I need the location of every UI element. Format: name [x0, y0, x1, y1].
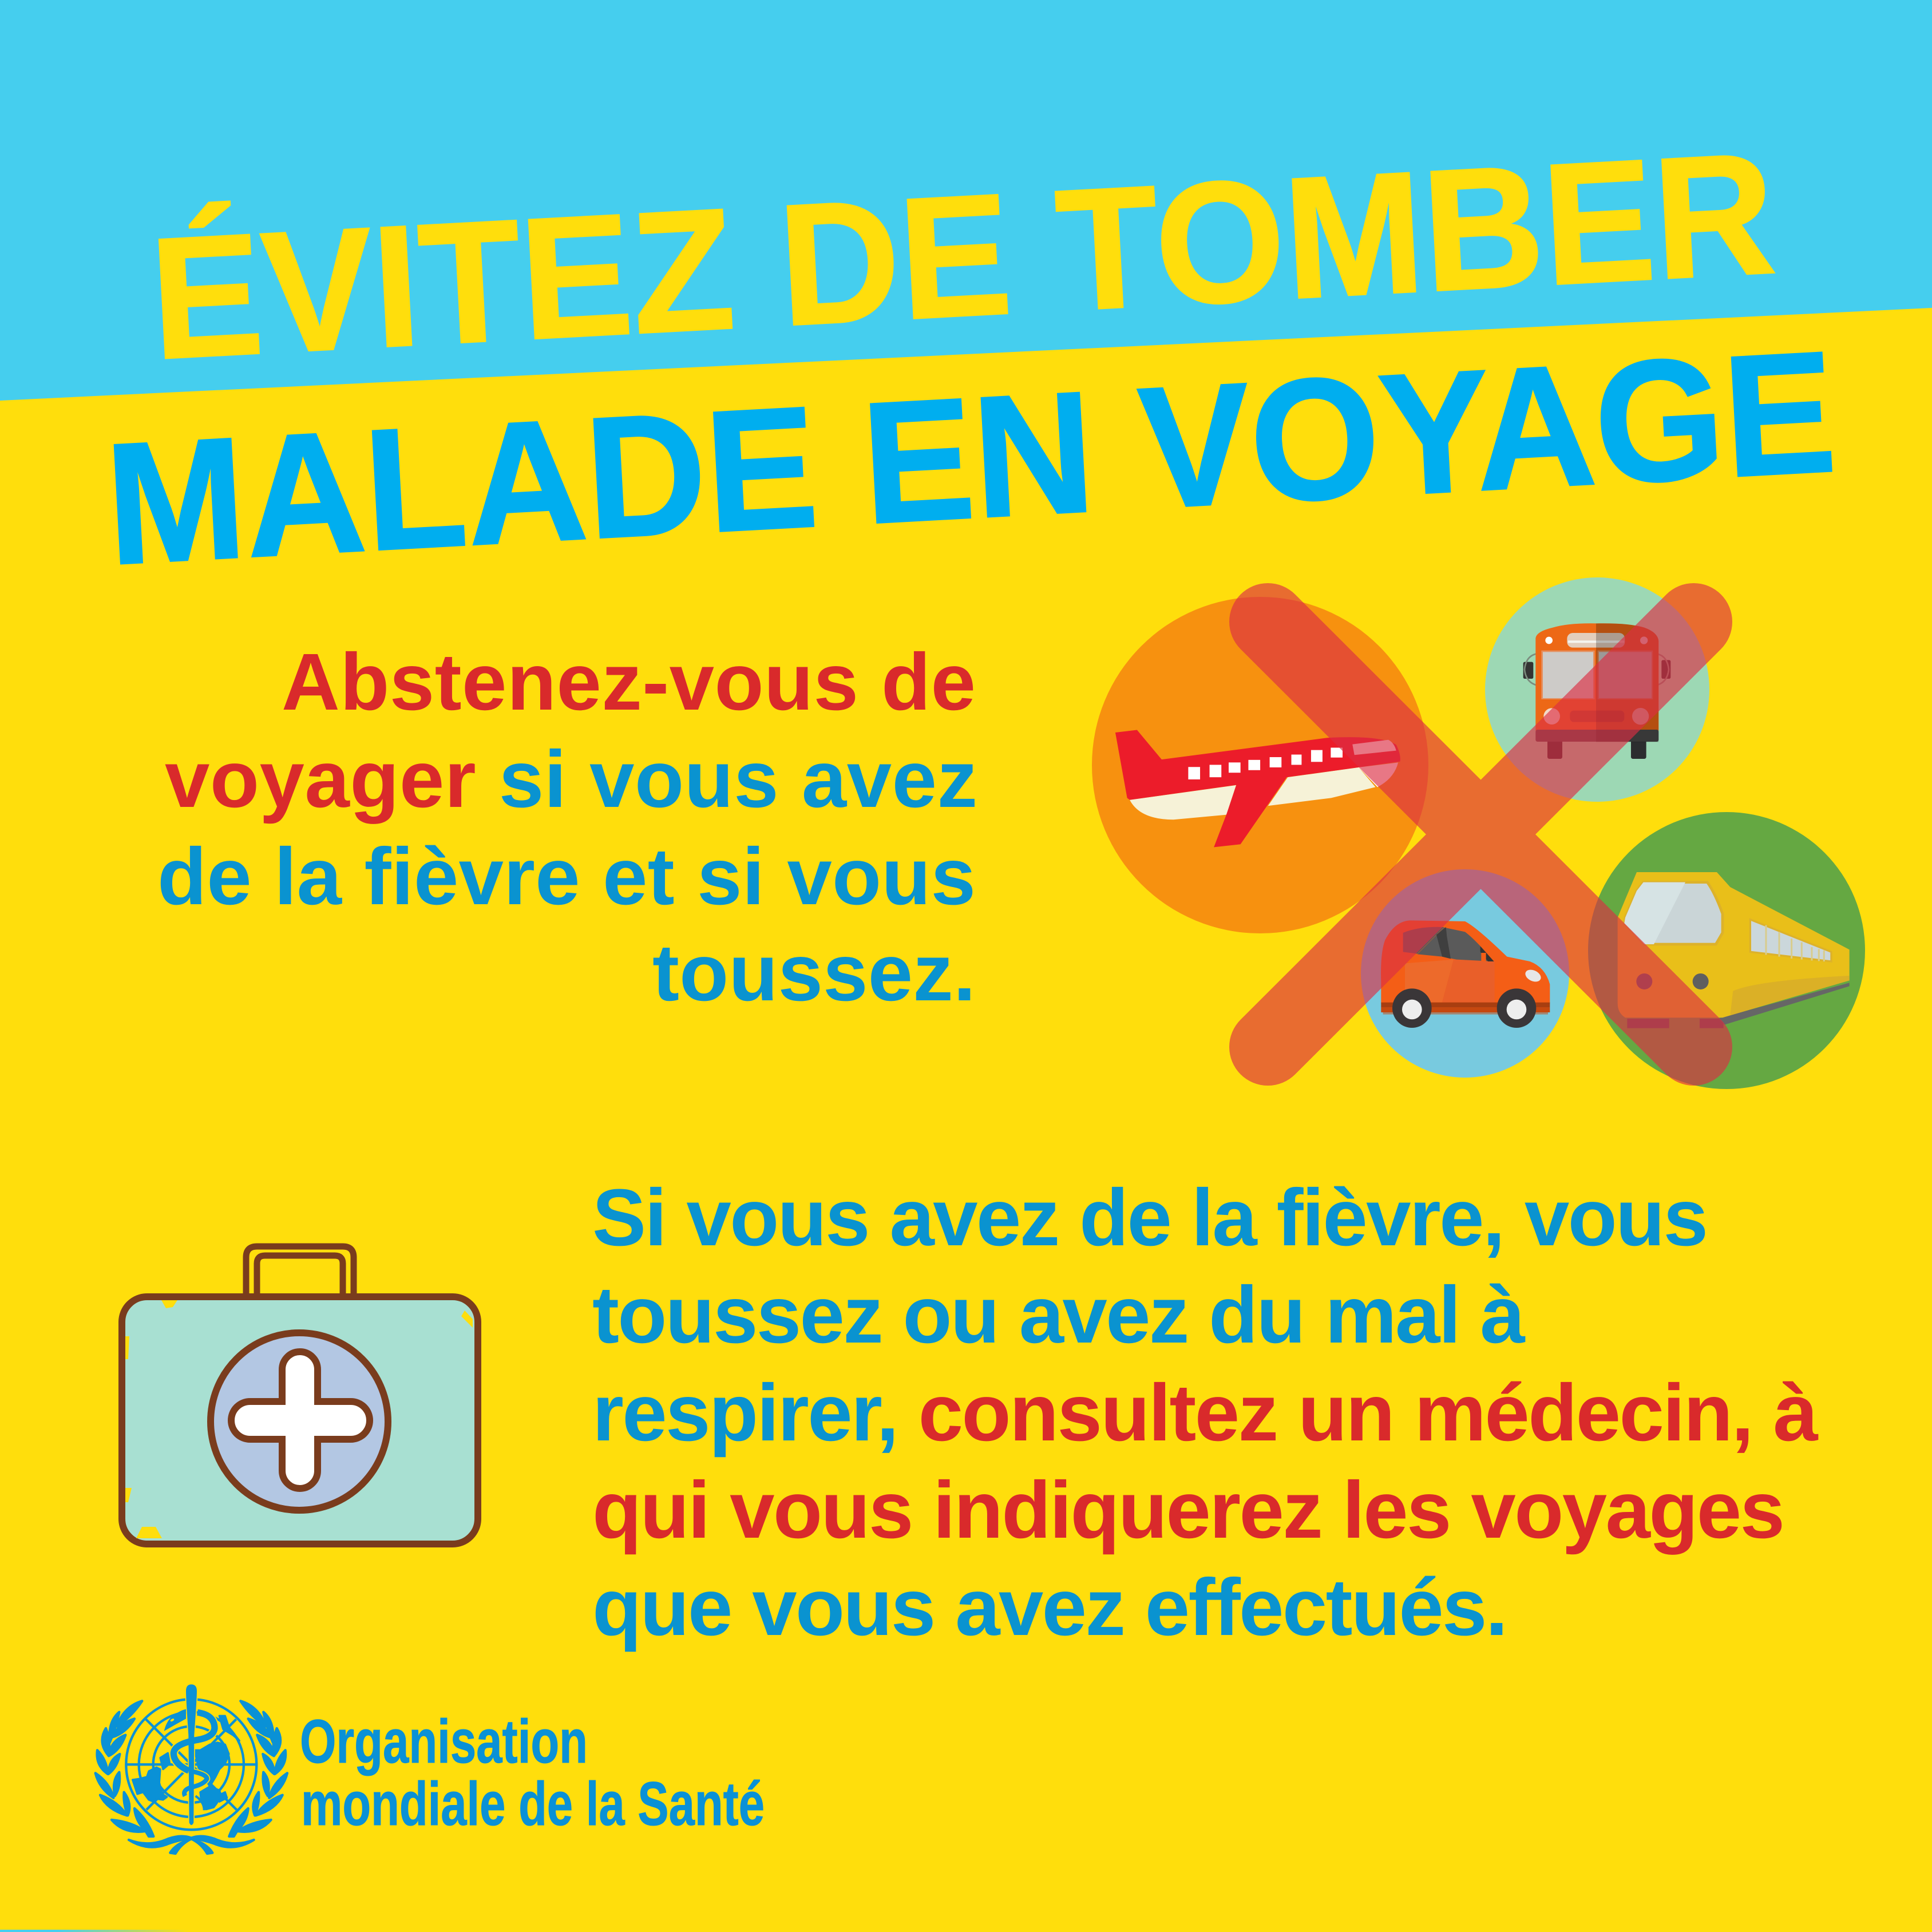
- text block: avoid travel: Abstenez-vous de: [282, 636, 976, 727]
- icon: train circle: [1588, 812, 1865, 1089]
- background: blue banner: [0, 0, 1932, 401]
- emblem: globe lines: [126, 1699, 256, 1830]
- title line 2: MALADE EN VOYAGE: [101, 315, 1840, 601]
- emblem: serpent and staff: [164, 1684, 215, 1825]
- icon: car circle: [1361, 869, 1569, 1078]
- text block: see a doctor: respirer, consultez un médecin, à: [592, 1367, 1819, 1458]
- icon: medical kit: [122, 1246, 478, 1544]
- text block: see a doctor: qui vous indiquerez les voyages: [592, 1464, 1785, 1555]
- emblem: left laurel: [96, 1701, 191, 1854]
- text block: see a doctor: que vous avez effectués.: [592, 1562, 1508, 1652]
- icon: bus: [1523, 623, 1670, 759]
- emblem: continents: [133, 1716, 239, 1810]
- text block: see a doctor: [592, 1172, 1819, 1652]
- text block: avoid travel: [157, 636, 977, 1018]
- icon: car: [1381, 920, 1550, 1028]
- text block: avoid travel: toussez.: [652, 927, 976, 1018]
- text block: see a doctor: Si vous avez de la fièvre, vous: [592, 1172, 1708, 1262]
- logo: WHO emblem: [96, 1684, 287, 1854]
- icon: train: [1618, 872, 1850, 1028]
- title line 1: ÉVITEZ DE TOMBER: [146, 116, 1779, 395]
- icon: plane circle: [1092, 597, 1428, 933]
- icon: crossed out transport: [1092, 577, 1865, 1089]
- text block: avoid travel: voyager si vous avez: [165, 734, 977, 824]
- icon: plane: [1115, 730, 1400, 847]
- text block: avoid travel: de la fièvre et si vous: [157, 831, 976, 921]
- logo text: mondiale de la Santé: [301, 1769, 765, 1838]
- logo text: [300, 1707, 765, 1838]
- text block: see a doctor: toussez ou avez du mal à: [592, 1269, 1526, 1360]
- icon: red cross-out X: [1268, 621, 1694, 1047]
- logo text: Organisation: [300, 1707, 588, 1776]
- icon: bus circle: [1485, 577, 1709, 802]
- emblem: right laurel: [191, 1701, 287, 1854]
